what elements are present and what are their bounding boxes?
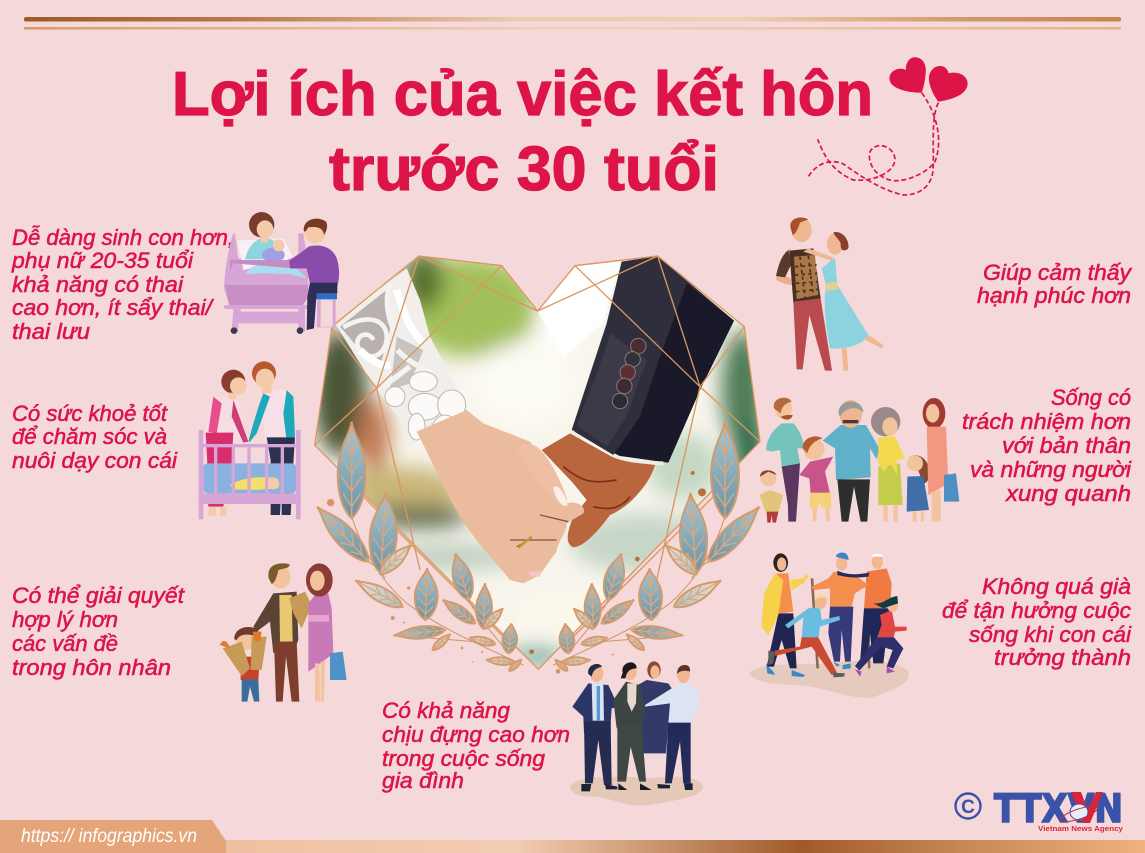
icon: heart balloons [808,57,968,195]
geometric copper frame [315,256,760,669]
bottom bar with website tab [0,820,1145,853]
text: happier [977,260,1133,308]
text: easy childbirth: Dễ dàng sinh con hơn, [12,225,234,250]
text: health to raise children: nuôi dạy con cái [12,448,178,473]
text: more responsible: và những người [970,457,1132,482]
text: resolve marriage issues: Có thể giải quyết [12,583,186,608]
bottom bar with website tab: https:// infographics.vn [21,825,197,847]
title: Lợi ích của việc kết hôn [172,60,873,129]
text: enjoy life when children grown: sống khi con cái [969,622,1132,647]
running girl [855,596,907,677]
grandfather [823,400,879,522]
text: happier: hạnh phúc hơn [977,283,1131,308]
illustration: three-generation family [759,398,959,523]
man in light shirt [645,665,698,790]
text: more responsible [962,385,1132,506]
text: resolve marriage issues [12,583,186,680]
text: more responsible: xung quanh [1005,481,1131,506]
text: enjoy life when children grown: trưởng thành [994,645,1131,670]
text: endurance in family life [382,698,570,793]
logo: TTXVN [956,787,1124,833]
illustration: couple with newborn in hospital bed [224,212,339,334]
text: easy childbirth: phụ nữ 20-35 tuổi [11,248,194,273]
logo: TTXVN: TTXVN [994,787,1123,832]
man seated [289,219,339,330]
girl [907,455,929,522]
text: happier: Giúp cảm thấy [983,260,1133,285]
text: resolve marriage issues: trong hôn nhân [12,655,171,680]
woman [803,232,883,371]
father [253,563,312,702]
text: endurance in family life: Có khả năng [382,698,510,723]
child with bags [220,627,267,702]
text: more responsible: Sống có [1051,385,1131,410]
grandparents [811,552,892,669]
man with beard [766,398,804,522]
grandmother [871,407,905,522]
title [172,60,873,204]
text: enjoy life when children grown: để tận hưởng cuộc [942,598,1131,623]
lace sleeve [336,268,467,453]
woman in yellow coat [761,553,808,677]
his hand [542,433,655,547]
logo: TTXVN: C [961,797,975,818]
crib [199,430,301,519]
text: more responsible: với bản thân [1002,433,1131,458]
father [248,361,295,515]
text: resolve marriage issues: hợp lý hơn [12,607,118,632]
text: easy childbirth: cao hơn, ít sẩy thai/ [12,295,215,320]
illustration: family carrying groceries [220,563,347,702]
man [776,217,832,371]
suit sleeve [572,256,734,463]
running boy [768,594,845,677]
text: health to raise children: Có sức khoẻ tốt [12,401,169,426]
text: health to raise children [12,401,178,473]
text: more responsible: trách nhiệm hơn [962,409,1131,434]
logo: TTXVN: Vietnam News Agency [1038,824,1124,833]
woman in grey suit [613,661,672,790]
top decorative bars [24,17,1121,30]
leaf wreath around heart [310,422,767,674]
decorative copper dots [327,499,614,674]
text: easy childbirth: thai lưu [12,319,90,344]
central heart photo with holding hands [310,250,767,673]
woman in bed [245,212,284,259]
text: health to raise children: để chăm sóc và [12,424,167,449]
illustration: four adults standing together [570,661,703,806]
mother with bag [923,398,959,522]
illustration: active family with walking sticks [749,552,909,698]
older boy [799,436,833,522]
text: endurance in family life: chịu đựng cao hơn [382,722,570,747]
text: enjoy life when children grown [942,574,1132,670]
text: enjoy life when children grown: Không quá già [982,574,1131,599]
text: easy childbirth: khả năng có thai [12,272,184,297]
dots on photo [529,471,711,654]
newborn [262,239,285,262]
text: easy childbirth [11,225,234,344]
mother [205,370,248,516]
illustration: dancing couple [776,217,883,371]
text: endurance in family life: trong cuộc sống [382,746,545,771]
her hand [417,410,584,583]
illustration: parents over crib [199,361,301,519]
man in navy suit [572,664,618,791]
mother [306,563,347,702]
title: trước 30 tuổi [329,135,719,204]
text: resolve marriage issues: các vấn đề [12,631,118,656]
small boy [759,470,783,523]
text: endurance in family life: gia đình [382,768,464,793]
